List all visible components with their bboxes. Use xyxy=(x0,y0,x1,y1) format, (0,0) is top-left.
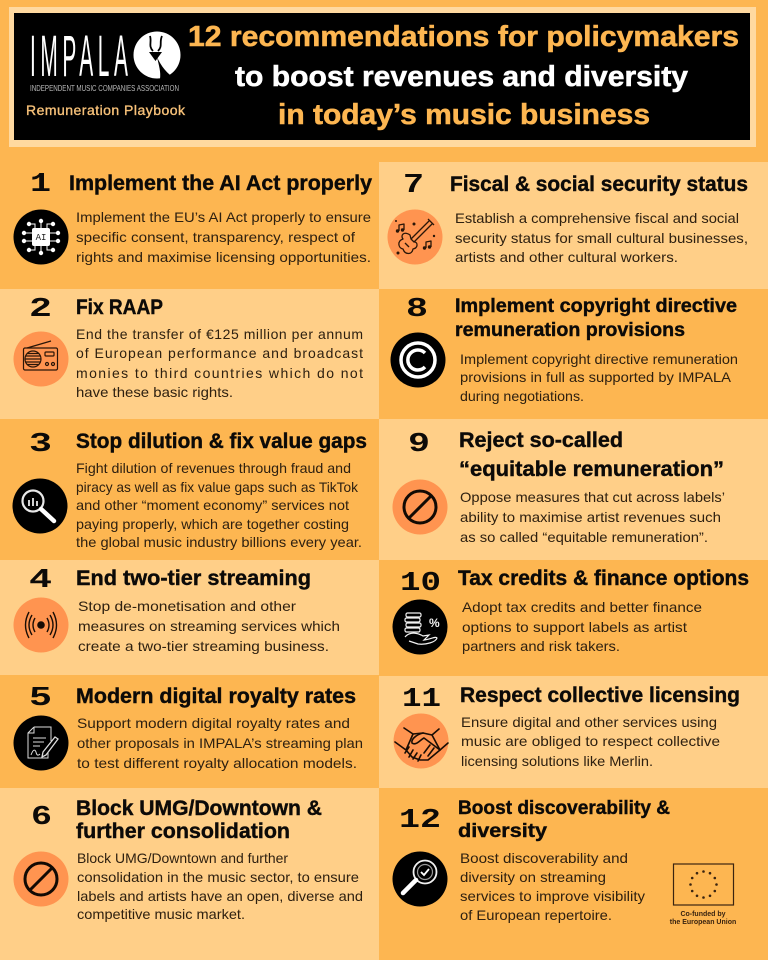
title: 12 recommendations for policymakers xyxy=(188,21,739,53)
EU co-funding emblem: the European Union xyxy=(670,919,736,926)
panel 7: fiscal status: 7 xyxy=(403,171,424,201)
icon: prohibition sign xyxy=(392,480,448,534)
icon: handshake xyxy=(394,714,448,768)
body text 10: partners and risk takers. xyxy=(462,638,620,654)
panel 8: copyright directive: remuneration provisions xyxy=(455,319,685,341)
icon: magnifier check xyxy=(392,852,448,906)
body text 5: to test different royalty allocation models. xyxy=(77,755,357,771)
IMPALA logo: IMPALA xyxy=(30,25,128,89)
body text 7: artists and other cultural workers. xyxy=(455,249,678,265)
icon: coins in hand xyxy=(392,600,448,654)
body text 7: security status for small cultural businesses, xyxy=(455,230,748,246)
panel 2: Fix RAAP: Fix RAAP xyxy=(76,296,163,319)
EU co-funding emblem xyxy=(670,864,736,926)
panel 4: streaming xyxy=(0,560,379,675)
panel 3: dilution: 3 xyxy=(29,430,52,460)
body text 3 xyxy=(76,460,362,550)
header banner xyxy=(9,7,756,147)
body text 2 xyxy=(76,326,363,400)
panel 6: consolidation: further consolidation xyxy=(76,820,290,843)
panel 4: streaming: 4 xyxy=(29,566,52,596)
panel 1: AI Act xyxy=(0,162,379,289)
panel 6: consolidation: 6 xyxy=(31,803,52,833)
body text 6 xyxy=(77,850,363,922)
body text 2: of European performance and broadcast xyxy=(76,345,363,361)
panel 6: consolidation xyxy=(0,788,379,960)
panel 9: equitable remuneration xyxy=(379,419,768,560)
body text 12: diversity on streaming xyxy=(460,869,606,885)
title: to boost revenues and diversity xyxy=(235,61,688,93)
body text 1: specific consent, transparency, respect of xyxy=(76,229,355,245)
panel 9: equitable remuneration: 9 xyxy=(408,430,430,460)
icon: copyright symbol xyxy=(390,332,446,388)
body text 3: piracy as well as fix value gaps such as TikTok xyxy=(76,479,359,495)
body text 6: Block UMG/Downtown and further xyxy=(77,850,288,866)
body text 11: Ensure digital and other services using xyxy=(461,714,717,730)
panel 9: equitable remuneration: Reject so-called xyxy=(459,429,623,452)
IMPALA logo: INDEPENDENT MUSIC COMPANIES ASSOCIATION xyxy=(30,84,179,93)
icon: AI chip: AI xyxy=(36,233,46,243)
body text 6: labels and artists have an open, diverse and xyxy=(77,888,363,904)
body text 3: and other “moment economy” services not xyxy=(76,497,349,513)
body text 11: music are obliged to respect collective xyxy=(461,733,720,749)
body text 2: monies to third countries which do not xyxy=(76,365,363,381)
body text 7: Establish a comprehensive fiscal and social xyxy=(455,210,739,226)
body text 1 xyxy=(76,209,371,265)
body text 1: rights and maximise licensing opportunities. xyxy=(76,249,371,265)
body text 7 xyxy=(455,210,748,265)
body text 12 xyxy=(460,850,645,923)
body text 8: Implement copyright directive remuneration xyxy=(460,351,738,367)
panel 12: discoverability: diversity xyxy=(458,820,547,842)
icon: AI chip xyxy=(14,210,68,264)
body text 12: of European repertoire. xyxy=(460,907,612,923)
body text 12: services to improve visibility xyxy=(460,888,645,904)
IMPALA logo xyxy=(26,25,186,118)
body text 4: measures on streaming services which xyxy=(78,618,340,634)
panel 5: royalty rates: Modern digital royalty rates xyxy=(76,685,356,708)
body text 2: End the transfer of €125 million per annum xyxy=(76,326,363,342)
body text 4: Stop de-monetisation and other xyxy=(78,598,296,614)
panel 10: tax credits: Tax credits & finance options xyxy=(458,567,749,590)
body text 4: create a two-tier streaming business. xyxy=(78,638,329,654)
body text 5: other proposals in IMPALA’s streaming plan xyxy=(77,735,363,751)
IMPALA logo: Remuneration Playbook xyxy=(26,102,186,118)
panel 6: consolidation: Block UMG/Downtown & xyxy=(76,797,322,820)
body text 6: competitive music market. xyxy=(77,906,245,922)
body text 5 xyxy=(77,715,363,771)
body text 1: Implement the EU’s AI Act properly to ensure xyxy=(76,209,371,225)
icon: radio xyxy=(14,332,68,386)
panel 12: discoverability: Boost discoverability & xyxy=(458,797,670,819)
panel 2: Fix RAAP xyxy=(0,289,379,419)
icon: guitar xyxy=(388,210,442,264)
panel 11: collective licensing xyxy=(379,676,768,788)
body text 9: as so called “equitable remuneration”. xyxy=(460,529,708,545)
icon: signed contract xyxy=(14,716,68,770)
body text 12: Boost discoverability and xyxy=(460,850,628,866)
panel 9: equitable remuneration: “equitable remuneration” xyxy=(459,458,724,481)
body text 2: have these basic rights. xyxy=(76,384,233,400)
panel 3: dilution xyxy=(0,419,379,560)
body text 6: consolidation in the music sector, to ensure xyxy=(77,869,359,885)
panel 1: AI Act: 1 xyxy=(30,170,51,200)
body text 5: Support modern digital royalty rates and xyxy=(77,715,350,731)
panel 10: tax credits: 10 xyxy=(400,569,441,599)
panel 5: royalty rates: 5 xyxy=(29,684,52,714)
body text 3: the global music industry billions every year. xyxy=(76,534,362,550)
panel 5: royalty rates xyxy=(0,675,379,788)
body text 9: ability to maximise artist revenues such xyxy=(460,509,721,525)
body text 11: licensing solutions like Merlin. xyxy=(461,753,653,769)
body text 8 xyxy=(460,351,738,404)
panel 3: dilution: Stop dilution & fix value gaps xyxy=(76,430,367,453)
body text 4 xyxy=(78,598,340,654)
body text 8: during negotiations. xyxy=(460,388,584,404)
panel 7: fiscal status: Fiscal & social security status xyxy=(450,173,748,196)
EU co-funding emblem: Co-funded by xyxy=(680,911,726,918)
title xyxy=(188,21,739,131)
body text 9 xyxy=(460,489,725,545)
body text 10: Adopt tax credits and better finance xyxy=(462,599,702,615)
body text 3: Fight dilution of revenues through fraud and xyxy=(76,460,351,476)
icon: signal xyxy=(14,598,68,652)
body text 9: Oppose measures that cut across labels’ xyxy=(460,489,725,505)
panel 8: copyright directive: 8 xyxy=(406,295,428,325)
title: in today’s music business xyxy=(278,99,650,131)
panel 1: AI Act: Implement the AI Act properly xyxy=(69,172,372,195)
body text 10: options to support labels as artist xyxy=(462,619,687,635)
panel 8: copyright directive xyxy=(379,289,768,419)
panel 2: Fix RAAP: 2 xyxy=(29,295,52,325)
icon: magnifier chart xyxy=(12,478,68,534)
body text 11 xyxy=(461,714,720,769)
panel 12: discoverability xyxy=(379,788,768,960)
body text 10 xyxy=(462,599,702,654)
panel 7: fiscal status xyxy=(379,162,768,289)
panel 12: discoverability: 12 xyxy=(399,806,441,836)
panel 4: streaming: End two-tier streaming xyxy=(76,567,311,590)
panel 8: copyright directive: Implement copyright directive xyxy=(455,295,737,317)
icon: coins in hand: % xyxy=(429,616,440,630)
body text 8: provisions in full as supported by IMPALA xyxy=(460,369,732,385)
panel 10: tax credits xyxy=(379,560,768,676)
panel 11: collective licensing: Respect collective licensing xyxy=(460,684,740,707)
panel 11: collective licensing: 11 xyxy=(402,685,441,715)
body text 3: paying properly, which are together costing xyxy=(76,516,349,532)
icon: prohibition sign xyxy=(14,852,68,906)
